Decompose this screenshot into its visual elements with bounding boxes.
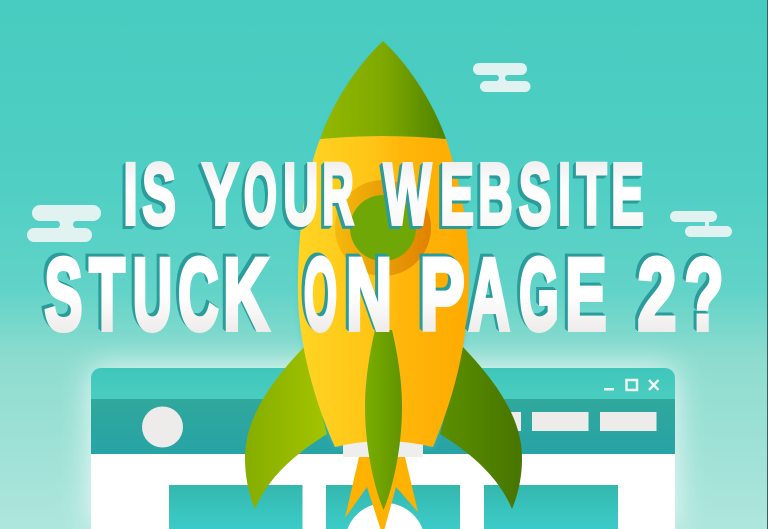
title line 1: I xyxy=(558,146,571,243)
title line 1: E xyxy=(611,146,644,243)
title line 1: O xyxy=(244,146,277,243)
title line 2: S xyxy=(44,238,82,352)
nozzle xyxy=(343,440,423,457)
content panel middle xyxy=(326,485,460,529)
title line 2: E xyxy=(565,238,607,352)
title line 1: Y xyxy=(202,146,239,243)
title line 1: R xyxy=(322,146,354,243)
title line 2: K xyxy=(223,238,269,352)
title line 2: U xyxy=(133,238,172,352)
title xyxy=(44,146,724,352)
title line 1: E xyxy=(440,146,474,243)
title line 1: U xyxy=(283,146,318,243)
window content area xyxy=(91,454,675,529)
title line 1: B xyxy=(478,146,513,243)
white glow behind browser window xyxy=(91,368,675,529)
title line 2: 2 xyxy=(638,238,676,352)
white circle in middle panel xyxy=(348,503,422,529)
nav button 1 xyxy=(464,412,521,431)
content panel right xyxy=(484,485,618,529)
title line 2: A xyxy=(468,238,510,352)
title line 2: C xyxy=(178,238,219,352)
title line 2: G xyxy=(519,238,559,352)
title line 2: O xyxy=(304,238,337,352)
center fin xyxy=(365,330,402,510)
right edge line xyxy=(767,0,768,529)
flames xyxy=(345,457,418,529)
rocket xyxy=(245,41,522,529)
cloud: left xyxy=(27,205,101,242)
title line 1: S xyxy=(519,146,551,243)
content panel left xyxy=(169,485,302,529)
nav button 3 xyxy=(600,412,656,431)
window title bar xyxy=(91,368,675,399)
rocket nose cone xyxy=(320,41,446,139)
title line 1: S xyxy=(142,146,176,243)
cloud: top right xyxy=(473,63,531,92)
title line 1: I xyxy=(123,146,138,243)
cloud: right xyxy=(670,211,732,237)
porthole ring xyxy=(335,180,431,276)
porthole glass xyxy=(350,195,416,261)
rocket body xyxy=(298,136,469,447)
nav button 2 xyxy=(532,412,588,431)
left fin xyxy=(245,347,327,509)
title line 2: T xyxy=(89,238,125,352)
title line 2: ? xyxy=(684,238,724,352)
title line 2: N xyxy=(346,238,392,352)
title line 1: W xyxy=(384,146,432,243)
title line 1: T xyxy=(576,146,607,243)
logo circle xyxy=(142,406,183,448)
window toolbar xyxy=(91,399,675,454)
browser window xyxy=(91,368,675,529)
right fin xyxy=(440,347,522,509)
title line 2: P xyxy=(420,238,465,352)
window controls: minimise, maximise, close xyxy=(604,380,658,390)
rocket soft halo xyxy=(298,41,469,447)
